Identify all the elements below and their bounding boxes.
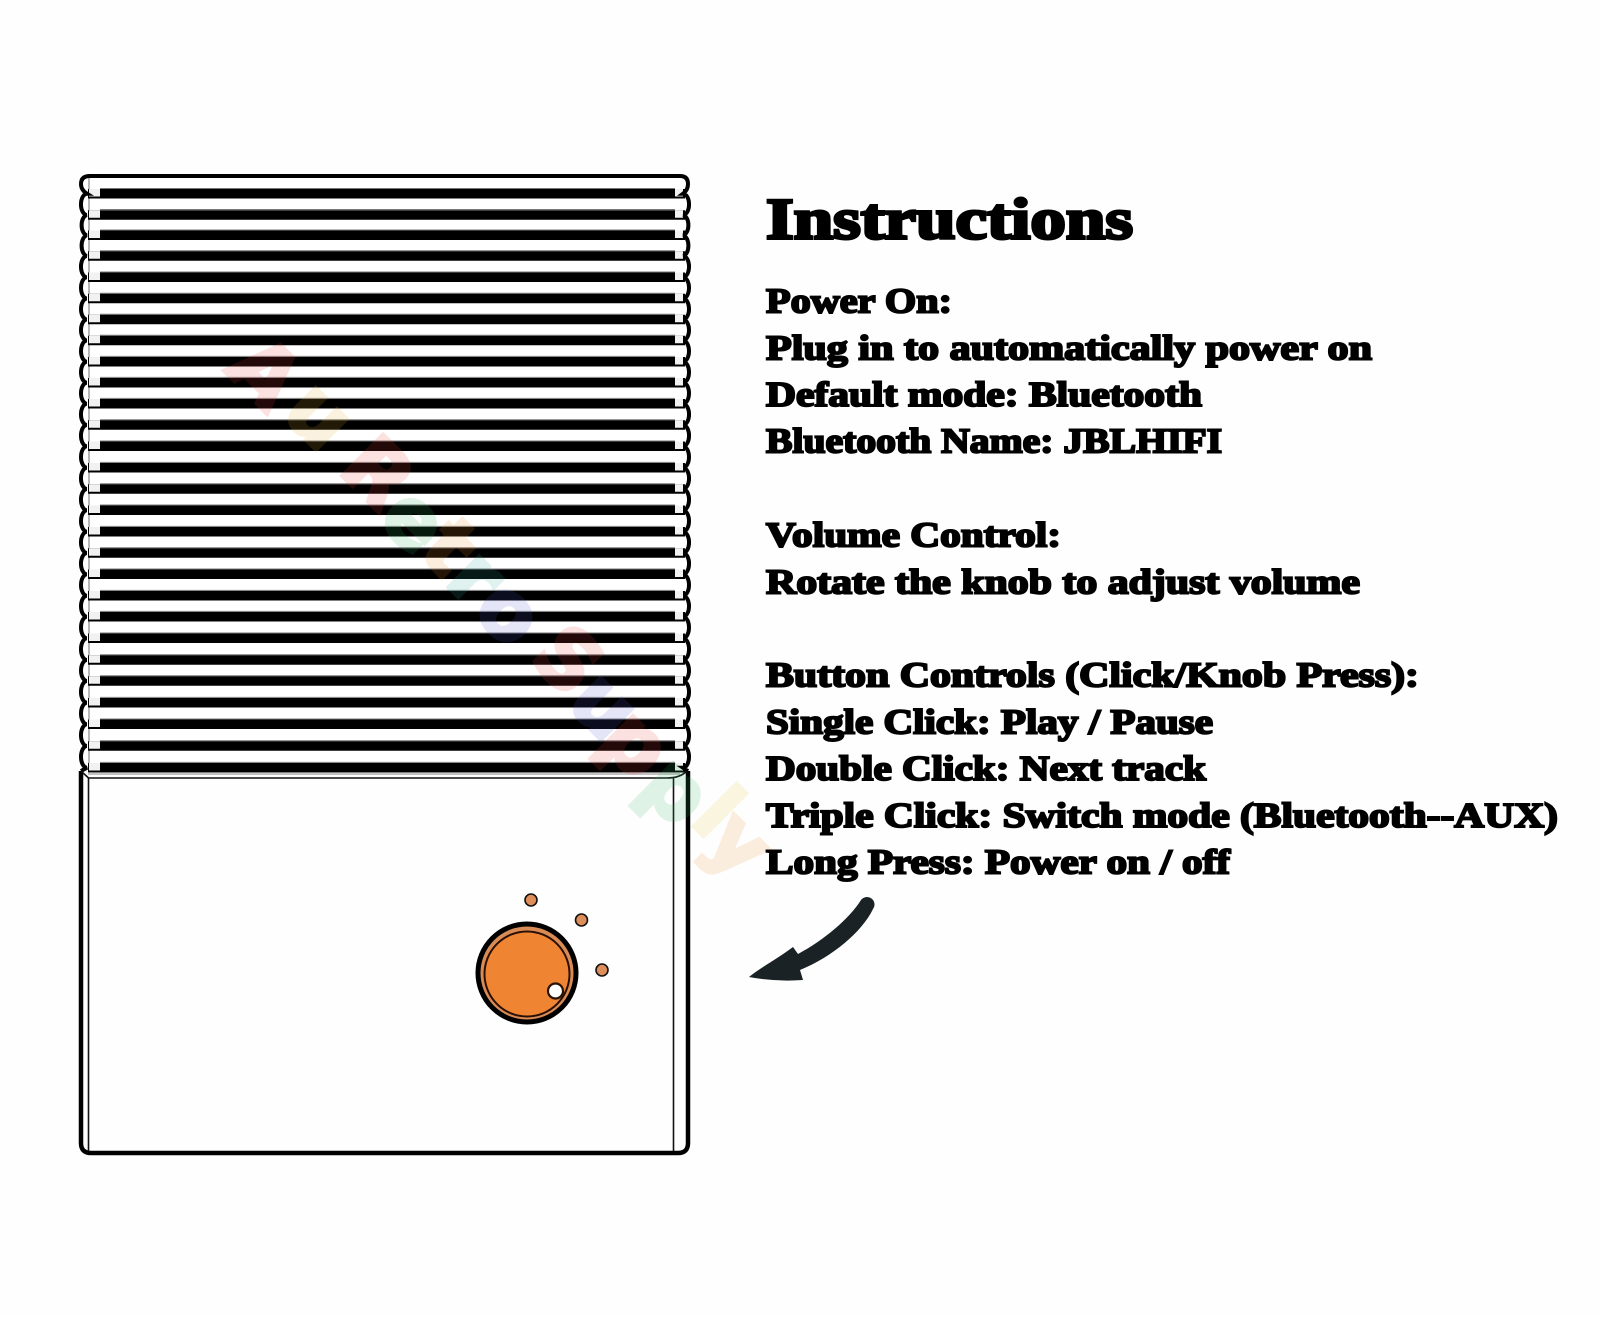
watermark: t bbox=[404, 501, 496, 593]
section: button controls: Single Click: Play / Pause bbox=[766, 702, 1213, 742]
speaker base panel bbox=[81, 771, 688, 1153]
watermark: e bbox=[363, 468, 467, 572]
section: button controls: Long Press: Power on / off bbox=[766, 842, 1230, 882]
watermark: p bbox=[584, 690, 690, 796]
watermark: u bbox=[552, 652, 658, 758]
section: power on: Bluetooth Name: JBLHIFI bbox=[766, 422, 1222, 460]
watermark: A bbox=[210, 318, 320, 428]
title: Instructions bbox=[766, 186, 1133, 252]
watermark: o bbox=[458, 560, 562, 664]
speaker grille ribs bbox=[81, 176, 689, 772]
watermark bbox=[210, 318, 791, 894]
section: volume control: Rotate the knob to adjust volume bbox=[766, 562, 1360, 602]
section: power on: Default mode: Bluetooth bbox=[766, 375, 1202, 414]
illustration: speaker bbox=[81, 176, 689, 1153]
section: button controls bbox=[766, 656, 1558, 882]
watermark: r bbox=[430, 530, 524, 624]
section: power on bbox=[766, 282, 1372, 460]
section: volume control bbox=[766, 516, 1360, 602]
watermark: p bbox=[624, 737, 730, 843]
arrow pointing to knob bbox=[749, 897, 874, 981]
watermark: R bbox=[323, 418, 433, 528]
watermark: l bbox=[675, 769, 761, 855]
section: power on: Power On: bbox=[766, 282, 952, 320]
watermark: y bbox=[689, 792, 791, 894]
section: button controls: Triple Click: Switch mode (Bluetooth--AUX) bbox=[766, 796, 1558, 835]
section: button controls: Button Controls (Click/Knob Press): bbox=[766, 656, 1419, 694]
watermark: u bbox=[267, 362, 373, 468]
section: volume control: Volume Control: bbox=[766, 516, 1061, 554]
volume knob bbox=[478, 894, 608, 1022]
watermark: S bbox=[515, 607, 621, 713]
section: power on: Plug in to automatically power on bbox=[766, 328, 1372, 368]
section: button controls: Double Click: Next track bbox=[766, 749, 1207, 788]
